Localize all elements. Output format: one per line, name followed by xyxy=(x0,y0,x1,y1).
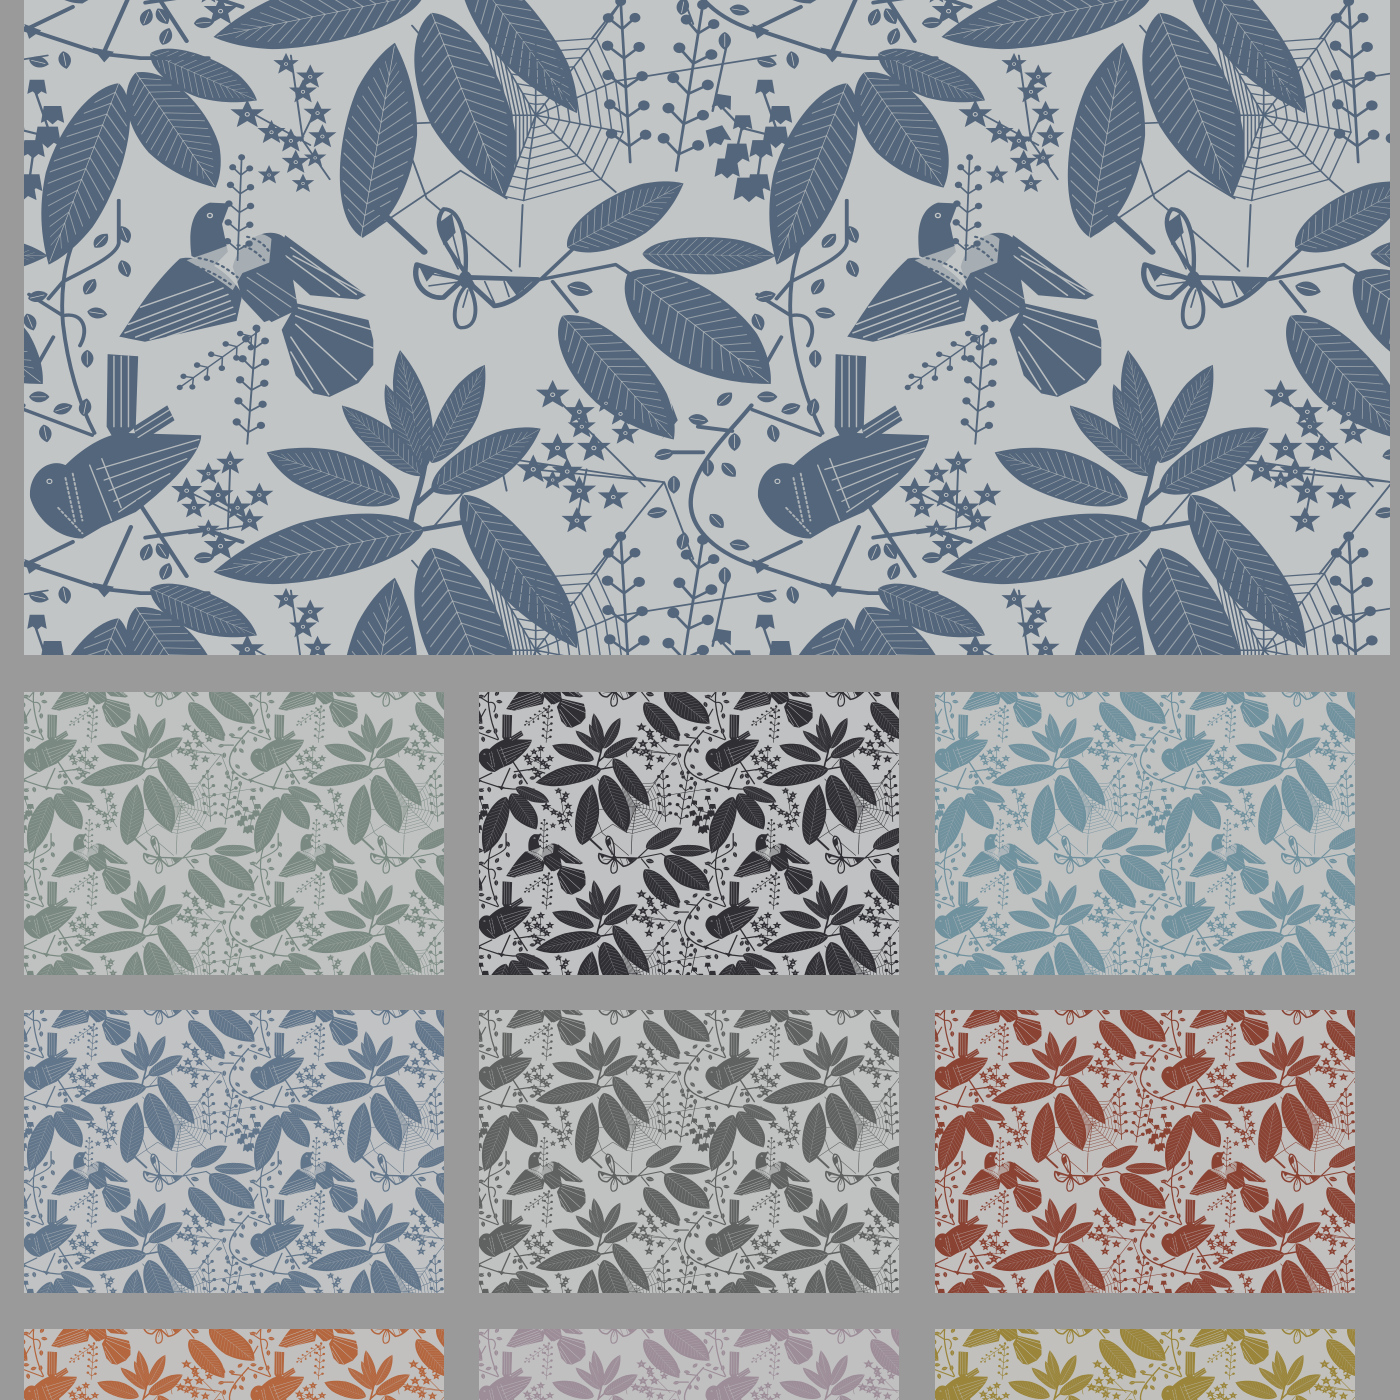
swatch: teal xyxy=(935,692,1355,975)
right vine xyxy=(646,0,761,568)
bird: speckled breast xyxy=(187,234,271,290)
small leaves and bells along top left branch xyxy=(27,6,792,202)
leaves: right cluster xyxy=(535,164,797,459)
bird: wings spread xyxy=(119,203,373,397)
small vine leaves: left xyxy=(21,201,134,443)
swatch: mauve xyxy=(479,1329,899,1400)
leaves: central cluster xyxy=(206,2,541,599)
swatch: charcoal grey xyxy=(479,1010,899,1293)
butterfly xyxy=(373,205,538,328)
swatch: mustard gold xyxy=(935,1329,1355,1400)
panel: large pattern print xyxy=(24,0,1390,655)
berry fronds xyxy=(169,0,727,445)
swatch: brick red xyxy=(935,1010,1355,1293)
spider web xyxy=(363,0,776,574)
plant: bottom centre leaves xyxy=(257,347,554,529)
swatch: orange xyxy=(24,1329,444,1400)
bird: perched with upright tail xyxy=(24,354,242,597)
leaves: upper left cluster xyxy=(14,36,267,274)
swatch: sage green xyxy=(24,692,444,975)
swatch: slate blue xyxy=(24,1010,444,1293)
swatch: black xyxy=(479,692,899,975)
star flower clusters xyxy=(171,53,664,559)
